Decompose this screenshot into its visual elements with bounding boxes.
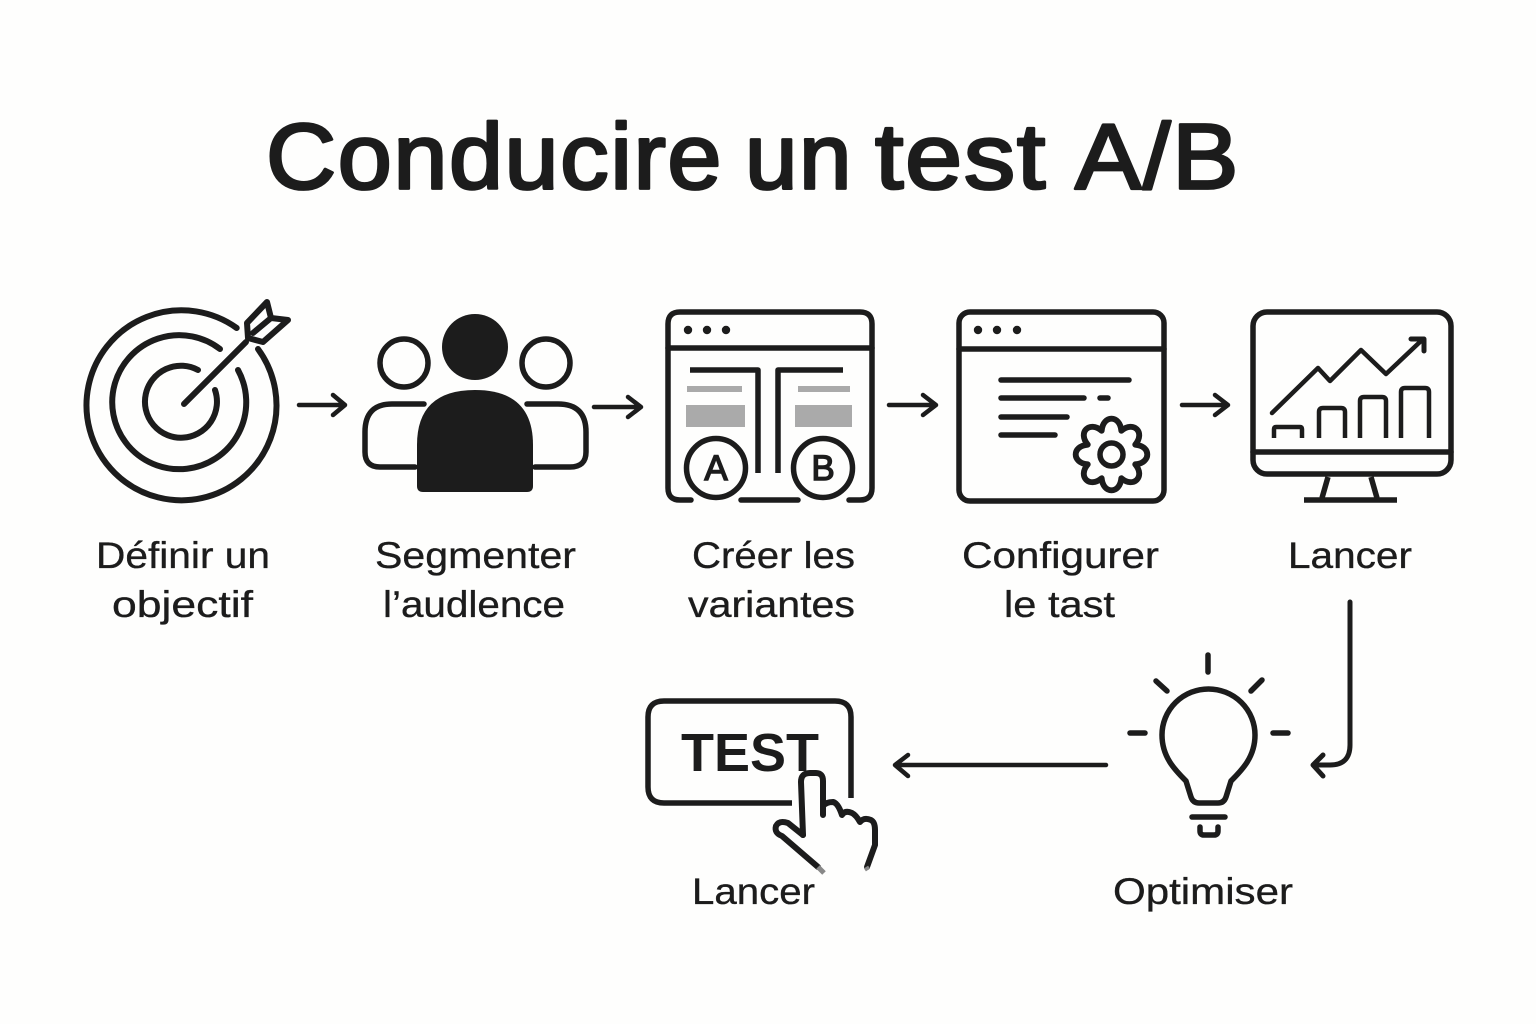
label: Définir un objectif: [96, 535, 270, 625]
arrow: Optimiser to TEST: [895, 755, 1106, 776]
label: Configurer le tast: Configurer: [962, 535, 1159, 576]
title: [266, 104, 1240, 208]
icon: A/B variants window: B: [811, 449, 835, 488]
label: Créer les variantes: Créer les: [692, 535, 855, 576]
arrow: Lancer down to Optimiser: [1313, 602, 1350, 776]
icon: light bulb: [1130, 655, 1288, 835]
title: test: [875, 104, 1047, 208]
label: Créer les variantes: variantes: [688, 584, 855, 625]
label: Lancer (bottom): Lancer: [692, 871, 815, 912]
arrow: step 1 to 2: [299, 395, 345, 415]
icon: TEST button with hand cursor: [648, 701, 875, 873]
label: Lancer: Lancer: [1288, 535, 1412, 576]
icon: configuration window with gear: [959, 312, 1164, 501]
label: Définir un objectif: Définir un: [96, 535, 270, 576]
icon: A/B variants window: [668, 312, 872, 500]
icon: monitor with growth chart: [1253, 312, 1451, 500]
label: Segmenter l'audlence: l’audlence: [383, 584, 565, 625]
icon: A/B variants window: A: [704, 449, 728, 488]
label: Segmenter l'audlence: [375, 535, 576, 625]
label: Segmenter l'audlence: Segmenter: [375, 535, 576, 576]
icon: TEST button with hand cursor: TEST: [681, 723, 819, 783]
arrow: step 4 to 5: [1182, 395, 1228, 415]
title: un: [745, 104, 853, 208]
label: Optimiser: Optimiser: [1113, 871, 1293, 912]
label: Configurer le tast: le tast: [1004, 584, 1116, 625]
icon: audience group: [365, 314, 586, 492]
label: Créer les variantes: [688, 535, 855, 625]
title: A/B: [1075, 104, 1240, 208]
label: Configurer le tast: [962, 535, 1159, 625]
arrow: step 3 to 4: [889, 395, 936, 415]
title: Conducire: [266, 104, 723, 208]
label: Définir un objectif: objectif: [112, 584, 254, 625]
arrow: step 2 to 3: [594, 397, 641, 417]
icon: target with arrow: [86, 302, 288, 500]
